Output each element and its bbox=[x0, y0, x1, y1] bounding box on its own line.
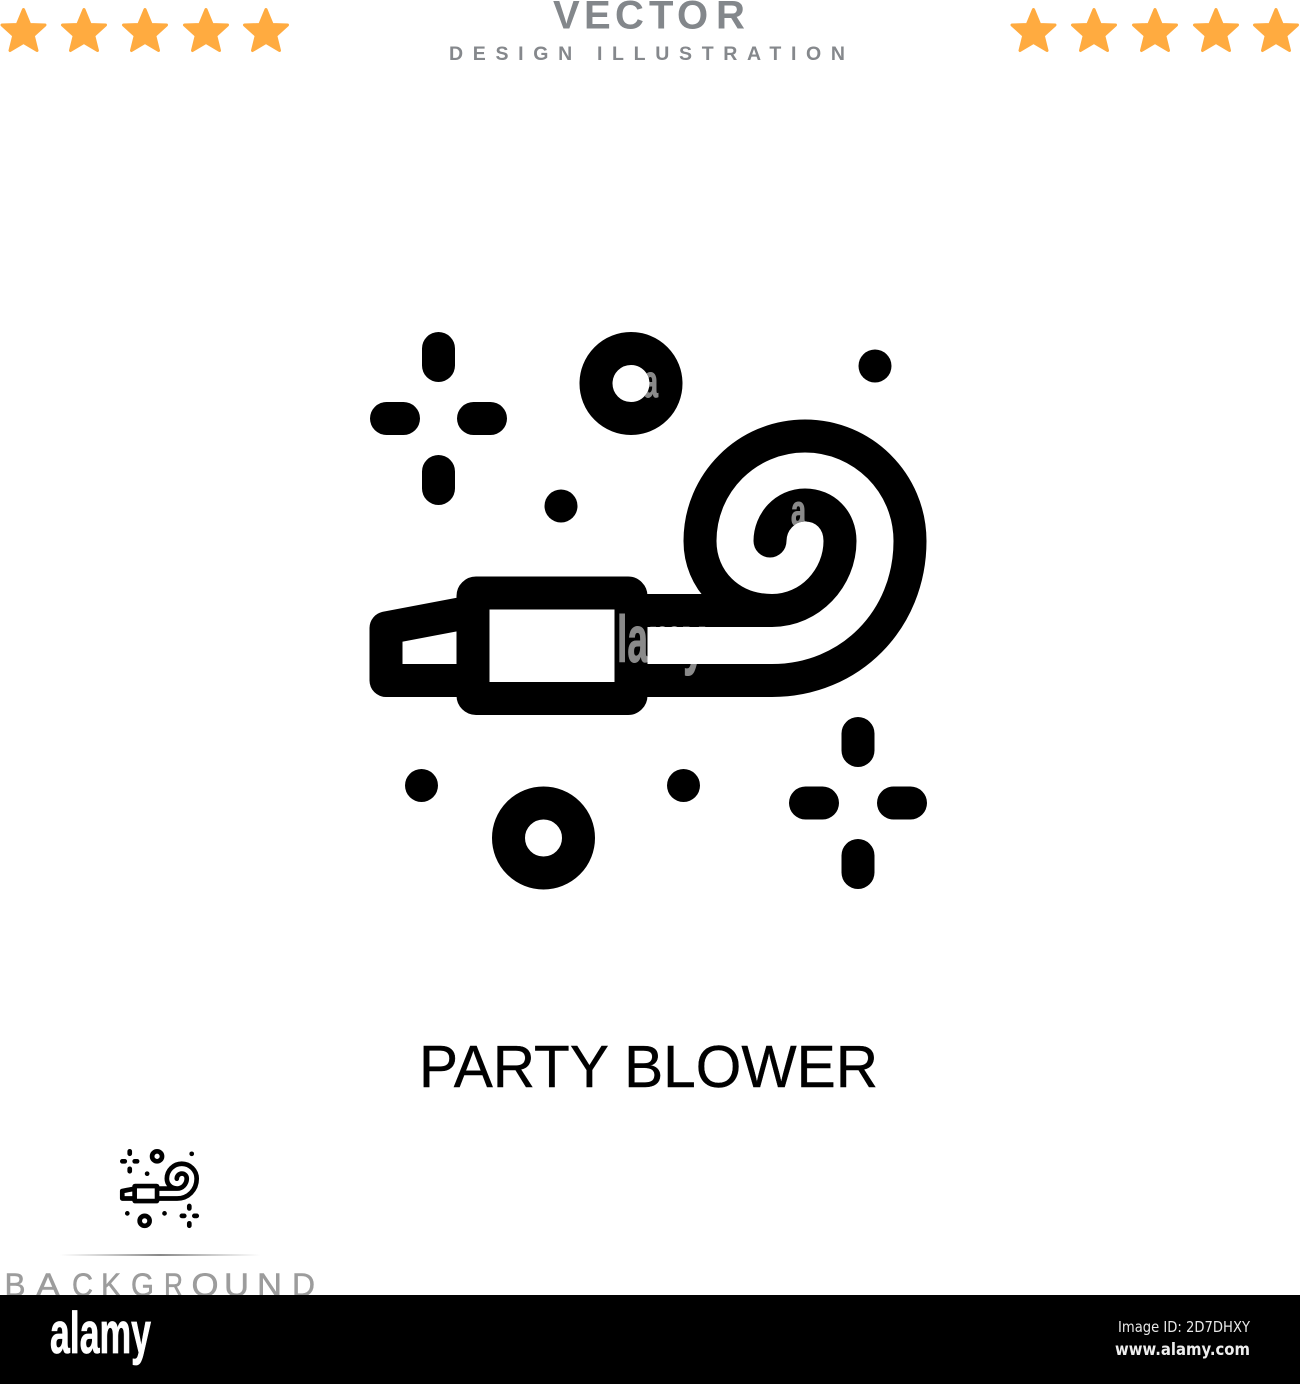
divider line bbox=[60, 1254, 260, 1256]
footer word: BACKGROUND bbox=[4, 1267, 315, 1303]
collar bbox=[473, 593, 631, 698]
image id: Image ID: 2D7DHXY bbox=[1118, 1318, 1251, 1336]
rating stars: left bbox=[2, 10, 288, 50]
watermark over icon: a bbox=[791, 487, 807, 535]
icon: party blower (large) bbox=[386, 348, 910, 873]
watermark over icon: la bbox=[617, 602, 649, 676]
footer word: BACKGROUND: O bbox=[192, 1267, 218, 1303]
header subtitle: DESIGN ILLUSTRATION: DESIGN ILLUSTRATION bbox=[449, 43, 845, 65]
footer word: BACKGROUND: D bbox=[292, 1267, 315, 1303]
footer word: BACKGROUND: B bbox=[4, 1267, 26, 1303]
footer word: BACKGROUND: G bbox=[131, 1267, 154, 1303]
watermark over icon: a bbox=[643, 356, 659, 407]
footer word: BACKGROUND: R bbox=[164, 1267, 183, 1303]
footer band bbox=[0, 1295, 1300, 1384]
mouthpiece bbox=[386, 612, 473, 680]
ring: top bbox=[596, 348, 666, 418]
sparkle: bottom right bbox=[806, 734, 910, 872]
rating stars: right bbox=[1012, 10, 1298, 50]
footer word: BACKGROUND: N bbox=[257, 1267, 282, 1303]
blower tube and spiral bbox=[631, 436, 910, 680]
footer word: BACKGROUND: U bbox=[224, 1267, 249, 1303]
footer word: BACKGROUND: A bbox=[36, 1267, 61, 1303]
icon: party blower (small) bbox=[122, 1151, 197, 1226]
watermark over icon bbox=[617, 356, 807, 676]
footer word: BACKGROUND: K bbox=[101, 1267, 121, 1303]
confetti dots bbox=[405, 350, 892, 802]
watermark over icon: my bbox=[648, 602, 705, 676]
sparkle: top left bbox=[386, 348, 490, 488]
website: www.alamy.com bbox=[1115, 1340, 1250, 1359]
ring: bottom bbox=[508, 803, 578, 873]
icon label: PARTY BLOWER: PARTY BLOWER bbox=[419, 1034, 878, 1100]
logo: alamy: alamy bbox=[50, 1301, 151, 1366]
footer word: BACKGROUND: C bbox=[72, 1267, 93, 1303]
